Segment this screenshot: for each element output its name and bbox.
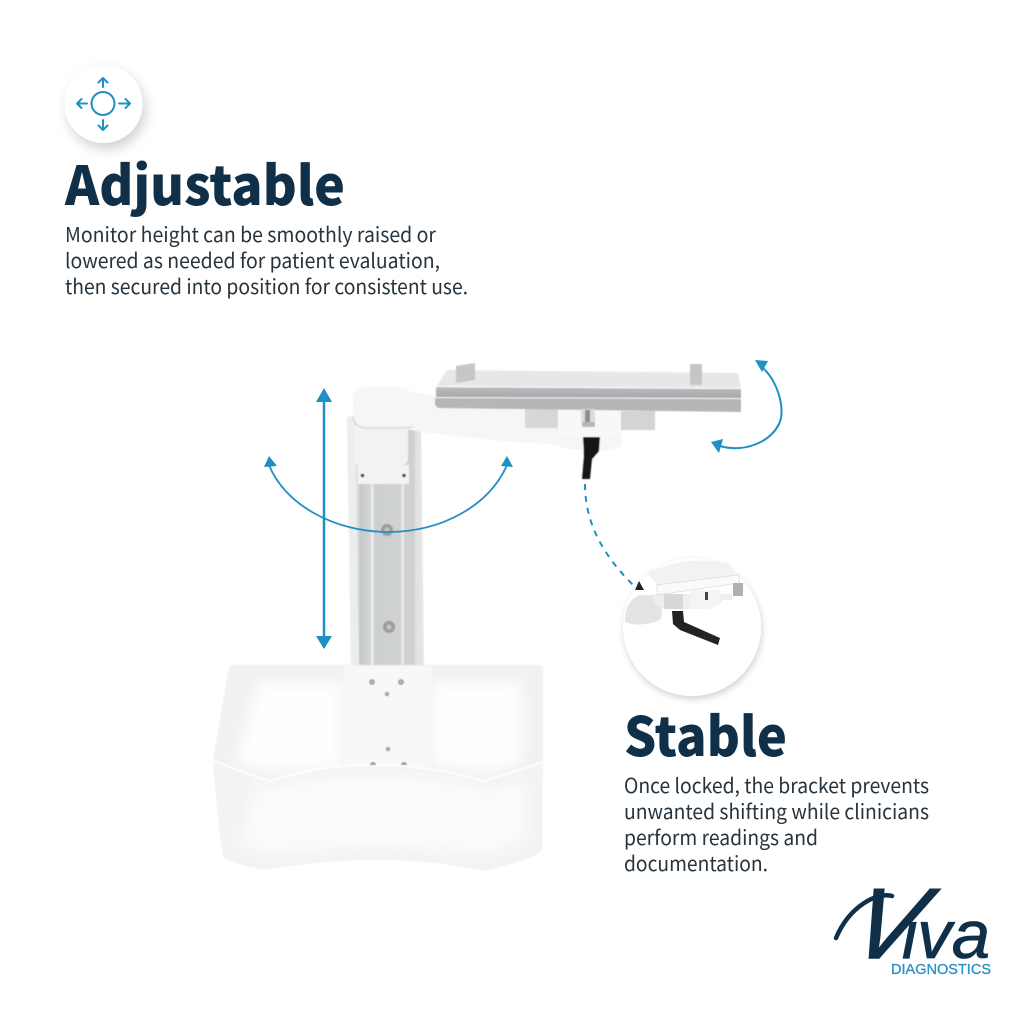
icon: adjust directions [64,65,142,143]
text block: adjustable description [65,218,468,300]
monitor plate [435,363,741,438]
arrow: dashed callout connector [585,484,633,585]
text block: stable description [624,769,929,877]
locking knob [581,409,600,479]
text block: stable description: perform readings and [624,821,818,851]
swivel arm [353,387,622,484]
text block: stable description: unwanted shifting while clinicians [624,795,929,825]
arrow: swivel arc [264,456,513,532]
logo: Viva Diagnostics: iva [902,897,990,973]
column [347,416,424,666]
text block: adjustable description: then secured into position for consistent use. [65,270,468,300]
text block: adjustable description: Monitor height can be smoothly raised or [65,218,436,248]
text block: stable description: Once locked, the bracket prevents [624,769,929,799]
logo: Viva Diagnostics: V [840,868,946,980]
text block: stable description: documentation. [624,847,768,877]
white storage bin [213,665,543,871]
heading: Adjustable: Adjustable [64,142,345,221]
arrow: vertical height adjustment [316,388,332,649]
logo: Viva Diagnostics: DIAGNOSTICS [891,962,991,978]
arrow: plate tilt arc [711,360,782,453]
heading: Stable: Stable [624,693,787,772]
text block: adjustable description: lowered as needed for patient evaluation, [65,244,440,274]
product: monitor bracket and bin [213,363,741,871]
callout: locking handle detail [623,558,761,696]
logo: Viva Diagnostics [836,868,991,980]
